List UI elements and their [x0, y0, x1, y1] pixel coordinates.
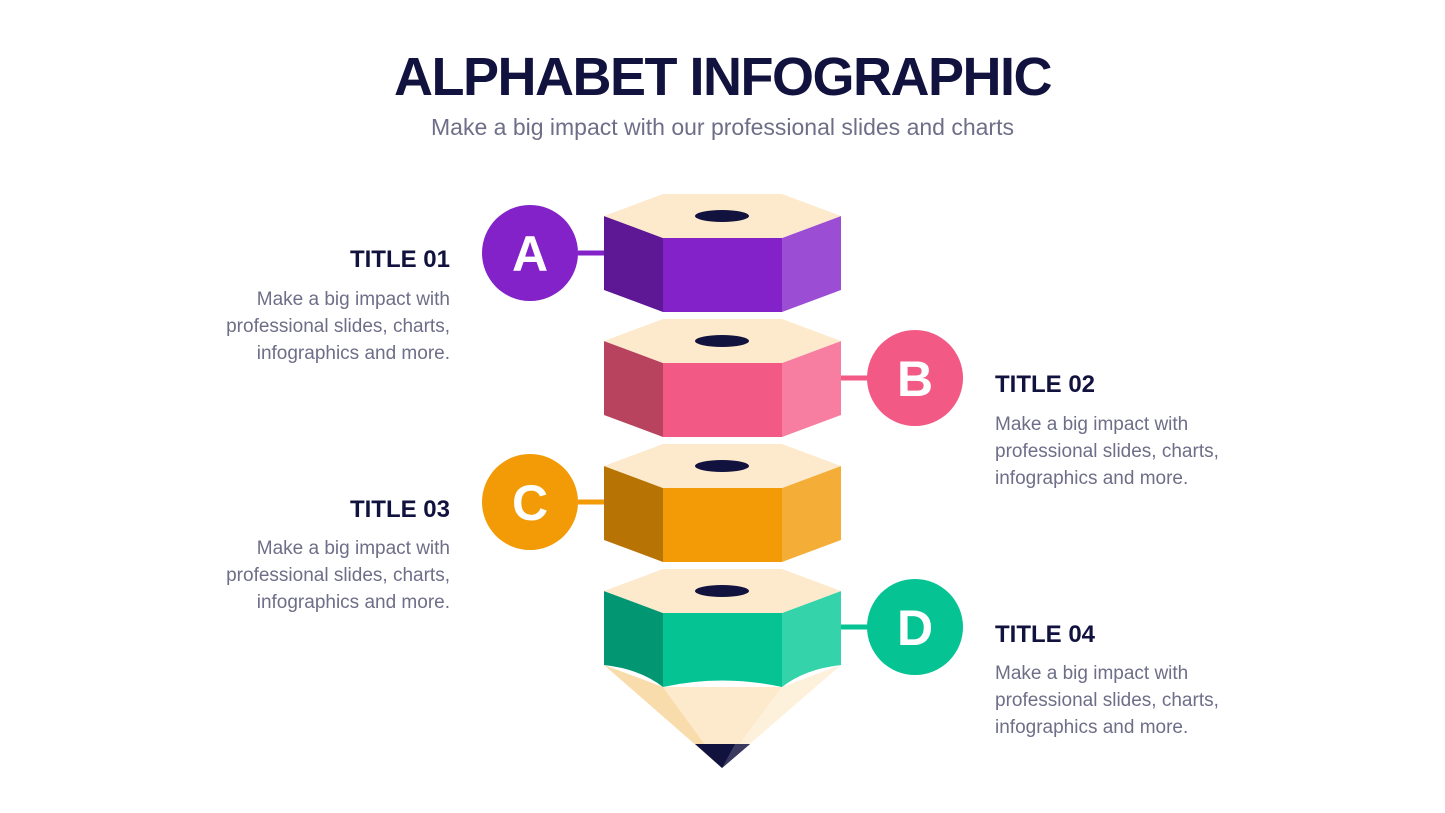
- text: body 02: infographics and more.: [995, 468, 1188, 489]
- text: body 02: professional slides, charts,: [995, 441, 1219, 462]
- circle B: B: [897, 351, 933, 407]
- text: title 01: TITLE 01: [350, 246, 450, 273]
- circle A: [482, 205, 578, 301]
- text: body 01: infographics and more.: [257, 343, 450, 364]
- text: body 01: Make a big impact with: [257, 289, 450, 310]
- text: title 02: TITLE 02: [995, 371, 1095, 398]
- circle C: [482, 454, 578, 550]
- text: body 03: infographics and more.: [257, 592, 450, 613]
- circle B: [867, 330, 963, 426]
- circle D: [867, 579, 963, 675]
- segment A: [578, 194, 841, 312]
- text: title 03: TITLE 03: [350, 496, 450, 523]
- text: body 02: [995, 414, 1219, 489]
- text: body 01: [226, 289, 450, 364]
- text: body 01: professional slides, charts,: [226, 316, 450, 337]
- text: body 03: Make a big impact with: [257, 538, 450, 559]
- text: body 04: Make a big impact with: [995, 663, 1188, 684]
- text: title 04: TITLE 04: [995, 621, 1095, 648]
- text: body 03: [226, 538, 450, 613]
- text: body 02: Make a big impact with: [995, 414, 1188, 435]
- segment D with tip: [604, 569, 868, 768]
- text: body 03: professional slides, charts,: [226, 565, 450, 586]
- subtitle: Make a big impact with our professional slides and charts: [431, 114, 1014, 140]
- text: body 04: [995, 663, 1219, 738]
- segment C: [578, 444, 841, 562]
- text: body 04: infographics and more.: [995, 717, 1188, 738]
- circle D: D: [897, 600, 933, 656]
- title: ALPHABET INFOGRAPHIC: [394, 47, 1051, 107]
- segment B: [604, 319, 868, 437]
- circle C: C: [512, 475, 548, 531]
- text: body 04: professional slides, charts,: [995, 690, 1219, 711]
- circle A: A: [512, 226, 548, 282]
